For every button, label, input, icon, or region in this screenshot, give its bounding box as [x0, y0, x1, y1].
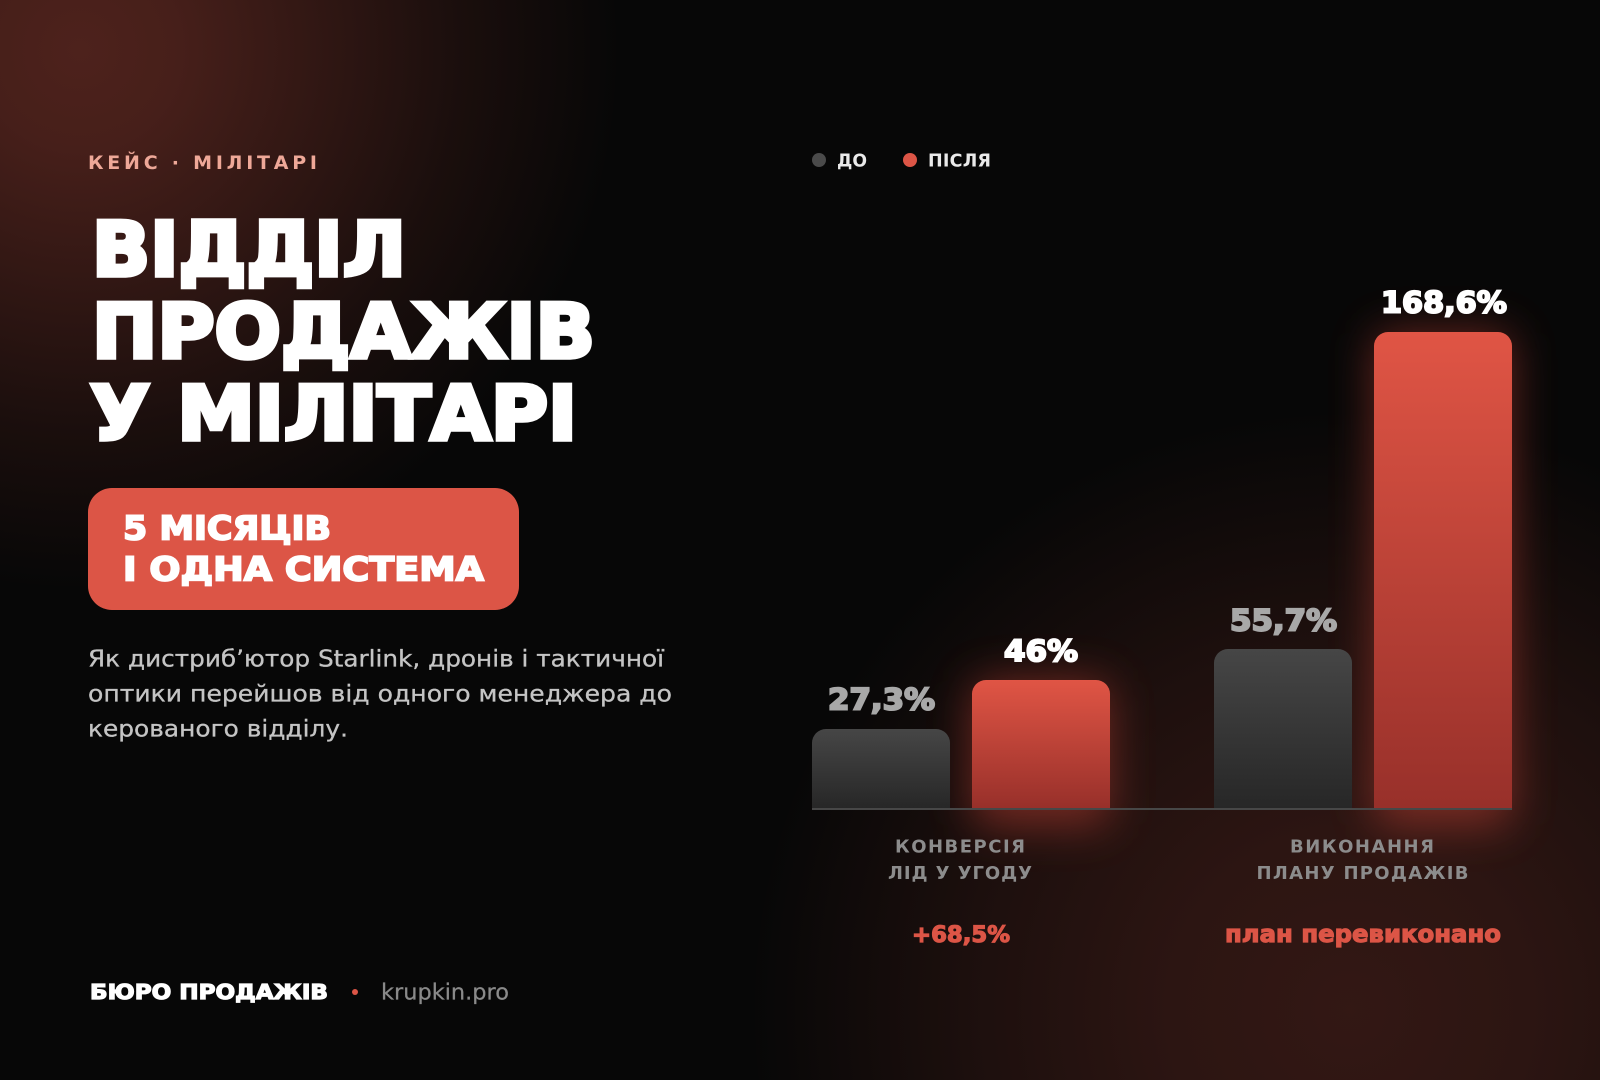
value labels: 27,3%	[828, 682, 935, 716]
footer brand: БЮРО ПРОДАЖІВ	[90, 980, 328, 1004]
title: У МІЛІТАРІ	[90, 370, 577, 458]
axis line	[812, 808, 1512, 810]
description text: Як дистриб’ютор Starlink, дронів і тактичної	[88, 646, 665, 672]
category: conversion	[888, 836, 1032, 884]
footer brand	[90, 980, 509, 1006]
description text: оптики перейшов від одного менеджера до	[88, 682, 672, 708]
category: plan	[1256, 836, 1468, 884]
legend: ДО	[837, 152, 867, 172]
highlight pill: 5 МІСЯЦІВ	[123, 508, 331, 548]
delta: plan: план перевиконано	[1225, 920, 1501, 948]
bar: conversion after	[972, 680, 1110, 808]
category: conversion: КОНВЕРСІЯ	[895, 836, 1025, 858]
category: plan: ВИКОНАННЯ	[1290, 836, 1434, 858]
category: plan: ПЛАНУ ПРОДАЖІВ	[1256, 863, 1468, 884]
bar: plan before	[1214, 649, 1352, 808]
description text: керованого відділу.	[88, 716, 348, 742]
bar glows	[972, 332, 1512, 826]
legend	[812, 152, 991, 172]
bar chart	[812, 332, 1512, 810]
value labels	[828, 286, 1507, 716]
footer brand: krupkin.pro	[381, 980, 509, 1006]
category: conversion: ЛІД У УГОДУ	[888, 863, 1032, 884]
title	[90, 206, 595, 458]
description text	[88, 646, 672, 742]
title: ПРОДАЖІВ	[92, 288, 595, 376]
highlight pill	[88, 488, 519, 610]
value labels: 46%	[1004, 634, 1078, 668]
bar: plan after	[1374, 332, 1512, 808]
title: ВІДДІЛ	[92, 206, 406, 294]
bar: conversion before	[812, 729, 950, 808]
eyebrow label: КЕЙС · МІЛІТАРІ	[88, 151, 317, 174]
value labels: 168,6%	[1381, 286, 1507, 320]
highlight pill: І ОДНА СИСТЕМА	[123, 550, 485, 588]
legend: ПІСЛЯ	[928, 152, 991, 172]
delta: conversion: +68,5%	[912, 923, 1010, 948]
value labels: 55,7%	[1230, 604, 1337, 638]
